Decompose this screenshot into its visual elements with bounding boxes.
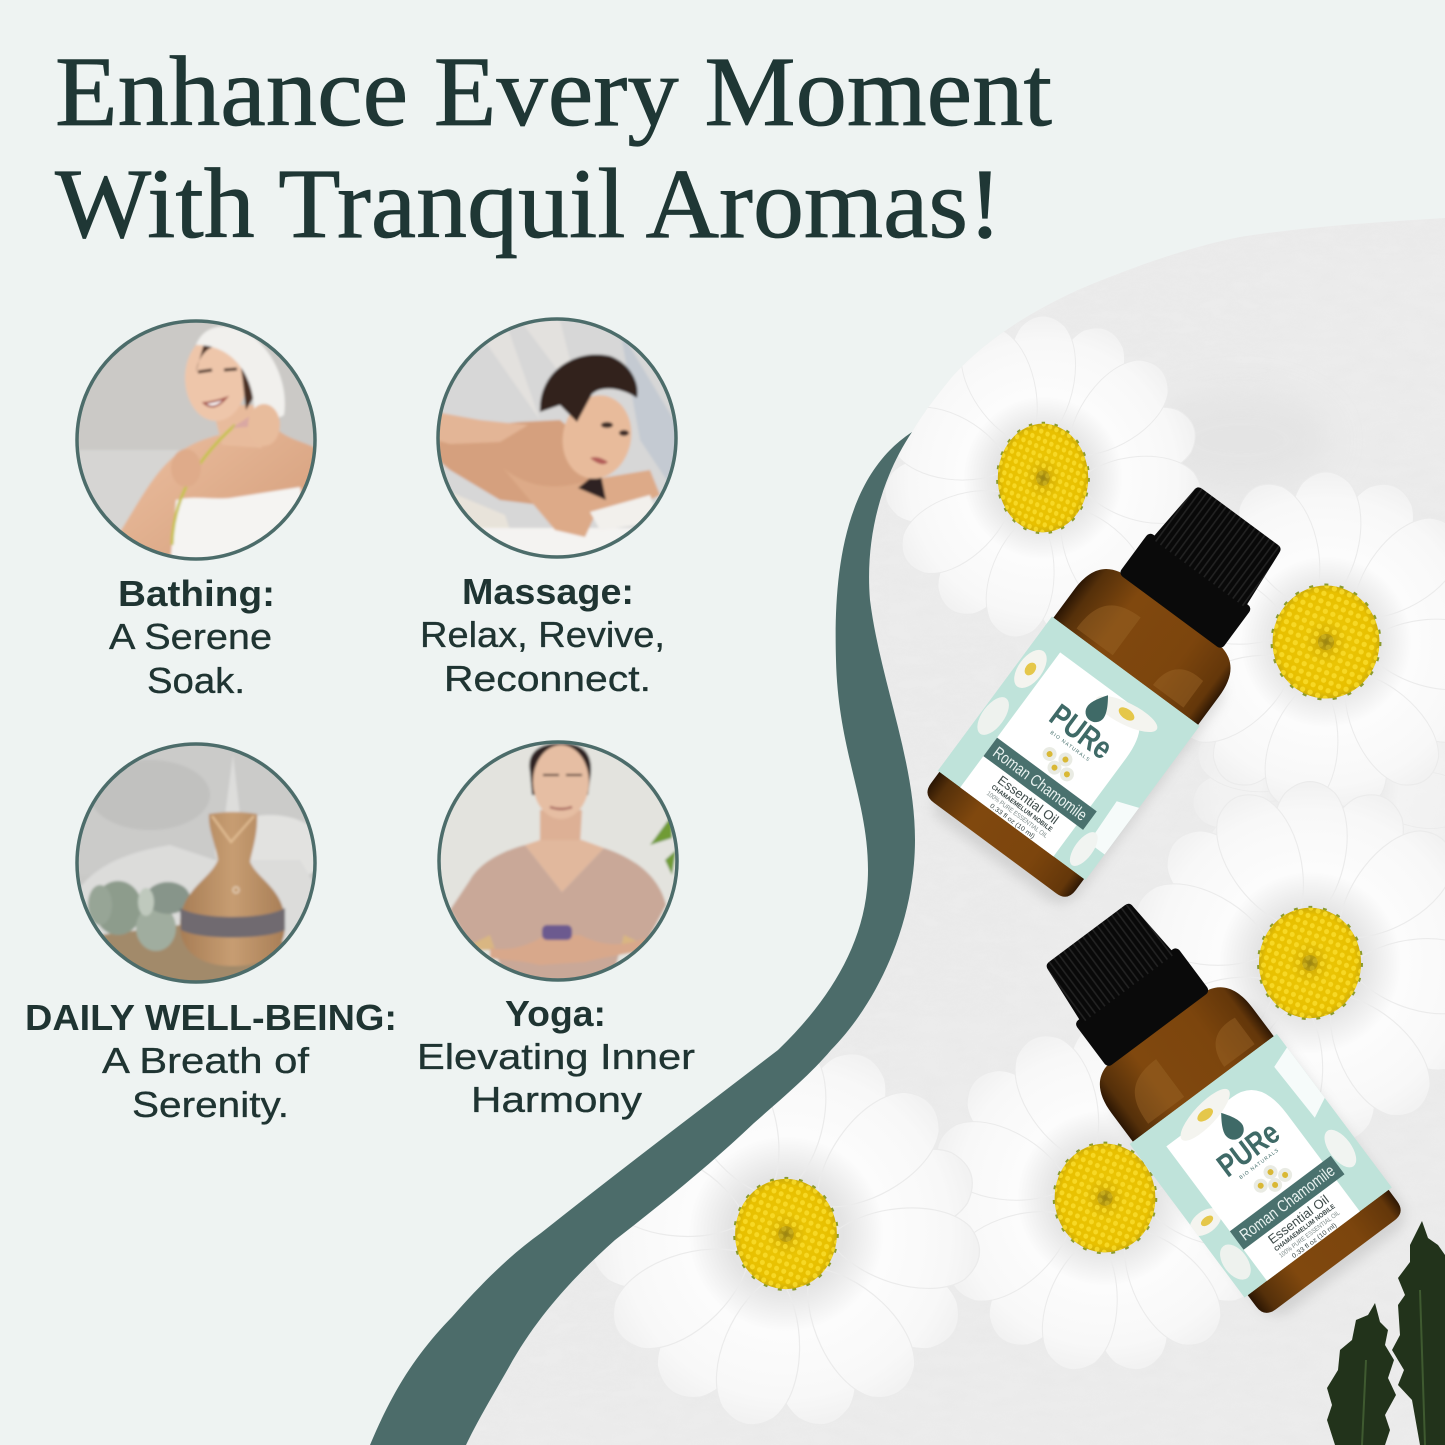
text block: massage: Massage: bbox=[462, 571, 634, 612]
product label bbox=[933, 616, 1200, 887]
photo: yoga meditation bbox=[435, 740, 680, 980]
photo: bathing woman bbox=[70, 320, 320, 565]
product details: 100% PURE ESSENTIAL OIL bbox=[1278, 1209, 1342, 1260]
text block: bathing: A Serene bbox=[109, 616, 272, 657]
product details bbox=[1264, 1191, 1347, 1266]
text block: yoga bbox=[417, 993, 695, 1120]
flower: middle right chamomile bbox=[1126, 782, 1445, 1148]
text block: massage: Relax, Revive, bbox=[420, 614, 665, 655]
amber glass body bbox=[923, 557, 1243, 902]
brand logo text: PURe bbox=[1043, 697, 1119, 766]
logo drop bbox=[1213, 1107, 1248, 1144]
title bbox=[55, 36, 1052, 259]
text block: yoga: Harmony bbox=[471, 1079, 642, 1120]
photo: aroma diffuser bbox=[75, 744, 325, 985]
text block: daily well-being: DAILY WELL-BEING: bbox=[25, 997, 397, 1038]
bottle shadow bbox=[1105, 995, 1413, 1324]
small chamomile bunch bbox=[1035, 740, 1083, 786]
title: Enhance Every Moment bbox=[55, 36, 1052, 147]
text block: daily well-being bbox=[25, 997, 397, 1125]
product details: Essential Oil bbox=[995, 772, 1062, 827]
panel: textured white backdrop bbox=[460, 210, 1445, 1445]
glass highlight bbox=[1077, 591, 1211, 708]
name band: Roman Chamomile bbox=[1236, 1162, 1339, 1244]
flower: top right chamomile bbox=[1197, 472, 1445, 804]
brand logo text: PURe bbox=[1210, 1114, 1286, 1184]
product label bbox=[1126, 1034, 1397, 1306]
text block: bathing: Soak. bbox=[147, 660, 245, 701]
flowers group bbox=[588, 316, 1445, 1432]
photo: massage bbox=[435, 318, 680, 563]
glass highlight bbox=[1120, 1006, 1255, 1124]
product details: Essential Oil bbox=[1265, 1192, 1332, 1247]
bottle shadow bbox=[925, 583, 1232, 913]
title: With Tranquil Aromas! bbox=[55, 148, 1002, 259]
logo drop bbox=[1082, 689, 1116, 726]
brand logo text: BIO NATURALS bbox=[1238, 1147, 1281, 1181]
icon: green leaves bbox=[1327, 1221, 1445, 1445]
text block: massage: Reconnect. bbox=[444, 658, 651, 699]
product details: 0.33 fl oz (10 ml) bbox=[1291, 1222, 1338, 1260]
flower: lower centre chamomile bbox=[945, 1034, 1242, 1366]
text block: bathing bbox=[109, 573, 275, 701]
bottle: upper essential oil bbox=[927, 487, 1281, 906]
flower: faded petals behind bottle bbox=[1251, 786, 1408, 816]
brand logo text: BIO NATURALS bbox=[1049, 730, 1091, 763]
text block: yoga: Yoga: bbox=[505, 993, 606, 1034]
black dropper cap bbox=[1118, 479, 1292, 650]
black dropper cap bbox=[1036, 895, 1210, 1068]
flower: bottom chamomile bbox=[588, 1040, 984, 1432]
text block: massage bbox=[420, 571, 665, 699]
product details: CHAMAEMELUM NOBILE bbox=[990, 784, 1054, 834]
name band bbox=[983, 738, 1097, 830]
flower: top left chamomile bbox=[882, 316, 1204, 643]
product details: CHAMAEMELUM NOBILE bbox=[1273, 1203, 1337, 1253]
product details: 100% PURE ESSENTIAL OIL bbox=[985, 790, 1049, 840]
text block: daily well-being: Serenity. bbox=[132, 1084, 289, 1125]
product details: 0.33 fl oz (10 ml) bbox=[988, 803, 1036, 840]
product details bbox=[980, 772, 1063, 847]
name band: Roman Chamomile bbox=[989, 744, 1090, 825]
text block: yoga: Elevating Inner bbox=[417, 1036, 695, 1077]
amber glass body bbox=[1087, 975, 1405, 1318]
text block: daily well-being: A Breath of bbox=[102, 1040, 310, 1081]
bottle: lower essential oil bbox=[1046, 904, 1406, 1317]
small chamomile bunch bbox=[1248, 1156, 1296, 1202]
text block: bathing: Bathing: bbox=[118, 573, 275, 614]
teal wave band bbox=[370, 432, 915, 1445]
